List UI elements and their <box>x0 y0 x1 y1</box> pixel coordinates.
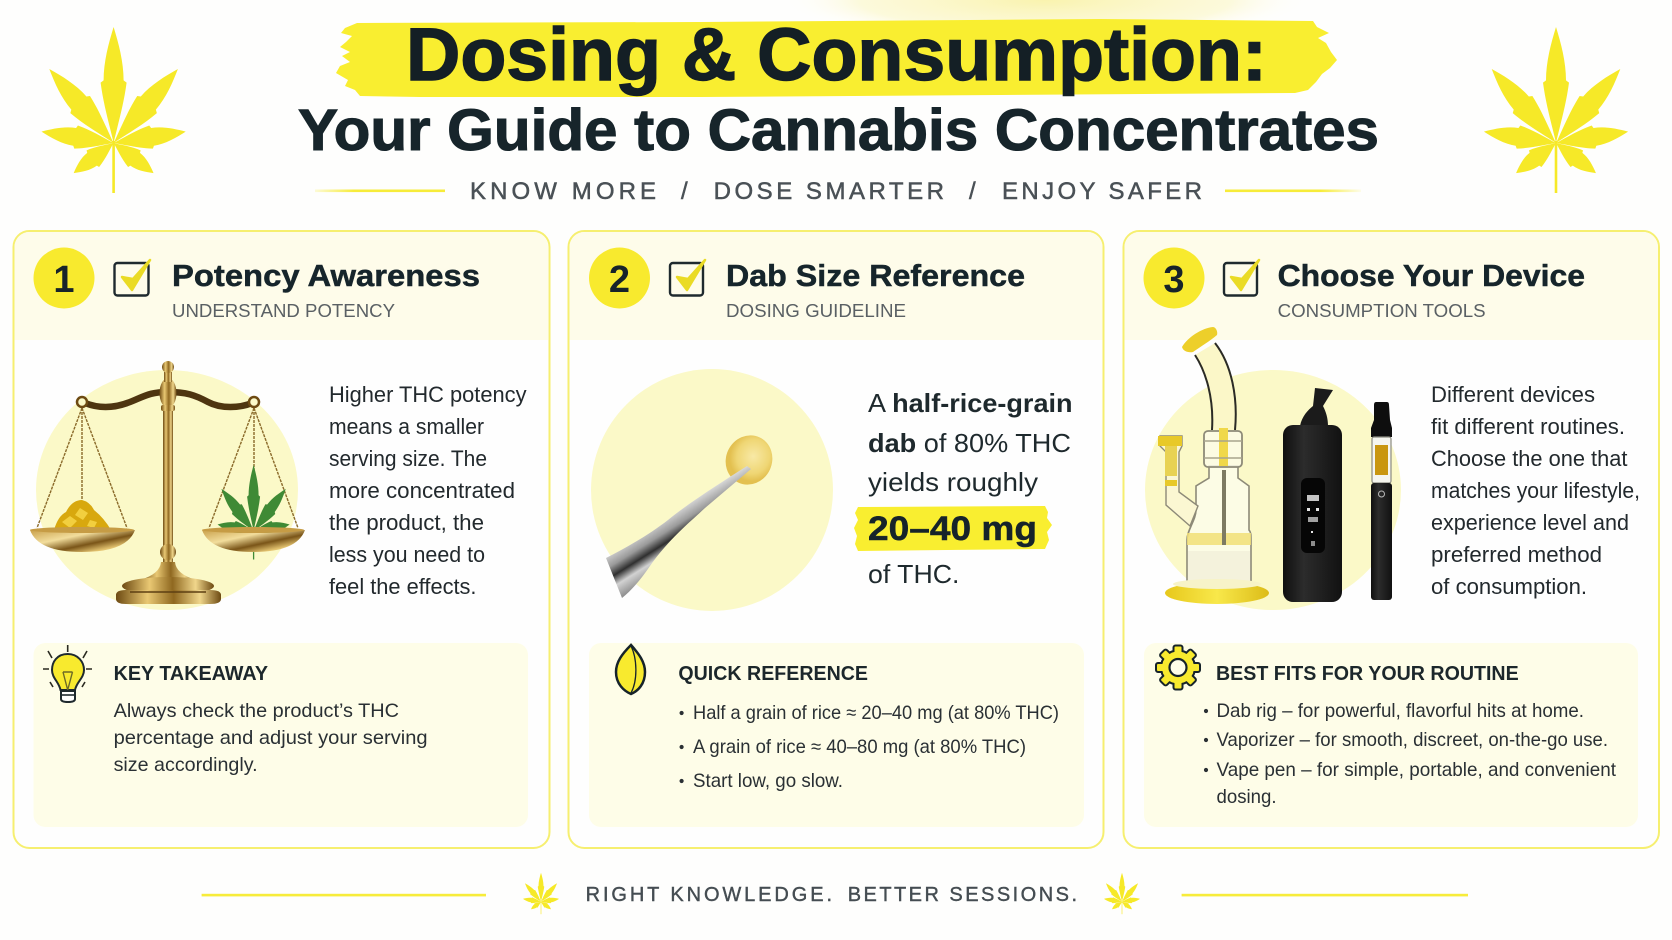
illustration: gold balance scale <box>30 361 305 610</box>
body text: dab of 80% THC <box>868 428 1071 458</box>
callout: quick reference <box>589 643 1084 827</box>
footer text: RIGHT KNOWLEDGE. <box>586 884 832 906</box>
icon: gear <box>1156 646 1200 690</box>
dab rig <box>1158 327 1269 604</box>
illustration: dab tool with concentrate <box>591 369 833 611</box>
bullet list: Start low, go slow. <box>693 770 843 792</box>
body text <box>854 388 1073 589</box>
callout heading: BEST FITS FOR YOUR ROUTINE <box>1216 663 1519 685</box>
body text: of consumption. <box>1431 574 1587 599</box>
number badge 1: 1 <box>53 259 75 301</box>
heading: Potency Awareness <box>172 258 480 293</box>
vaporizer <box>1283 388 1342 602</box>
icon: left cannabis leaf <box>39 27 188 193</box>
panel: choose your device <box>1124 231 1659 848</box>
number badge 3 <box>1144 248 1204 308</box>
bullet list: Vaporizer – for smooth, discreet, on-the-go use. <box>1216 729 1608 751</box>
body text: matches your lifestyle, <box>1431 478 1640 503</box>
illustration: dab rig, vaporizer and vape pen <box>1145 327 1401 610</box>
bullet list: Dab rig – for powerful, flavorful hits at home. <box>1216 700 1584 722</box>
body text <box>1431 382 1640 599</box>
card header band <box>1124 232 1658 340</box>
tagline: / <box>681 178 688 205</box>
icon: checkbox <box>1224 260 1259 296</box>
highlight: dose range <box>854 506 1052 551</box>
body text: preferred method <box>1431 542 1602 567</box>
callout heading: KEY TAKEAWAY <box>114 663 269 685</box>
bullet list: dosing. <box>1216 786 1276 808</box>
body text: fit different routines. <box>1431 414 1625 439</box>
callout text: percentage and adjust your serving <box>114 727 428 749</box>
body text: Different devices <box>1431 382 1595 407</box>
icon: right cannabis leaf <box>1482 27 1630 193</box>
body text: serving size. The <box>329 446 487 471</box>
number badge 2: 2 <box>609 259 630 301</box>
callout: key takeaway <box>34 643 528 827</box>
bullet list <box>680 702 1059 792</box>
bullet list <box>1204 700 1617 808</box>
body text: Higher THC potency <box>329 382 526 407</box>
footer text: BETTER SESSIONS. <box>848 884 1077 906</box>
subheading: DOSING GUIDELINE <box>726 301 906 321</box>
body text: more concentrated <box>329 478 515 503</box>
tagline <box>315 178 1361 205</box>
callout text: size accordingly. <box>114 754 258 776</box>
icon: small leaf right <box>1103 873 1141 914</box>
callout text: Always check the product’s THC <box>114 700 399 722</box>
icon: small leaf left <box>522 873 560 914</box>
heading: Dab Size Reference <box>726 258 1025 293</box>
number badge 2 <box>589 248 650 308</box>
card header band <box>570 232 1102 340</box>
tagline: DOSE SMARTER <box>714 178 944 205</box>
icon: light bulb <box>43 645 92 702</box>
card frame <box>14 231 550 848</box>
tagline: / <box>969 178 976 205</box>
icon: rice grain <box>616 645 645 694</box>
number badge 1 <box>34 248 94 308</box>
number badge 3: 3 <box>1163 259 1185 301</box>
card frame <box>568 231 1104 848</box>
vape pen <box>1371 402 1392 600</box>
subheading: UNDERSTAND POTENCY <box>172 301 395 321</box>
title brush highlight <box>336 19 1337 97</box>
bullet list: Vape pen – for simple, portable, and convenient <box>1216 759 1617 781</box>
body text <box>329 382 526 599</box>
body text: the product, the <box>329 510 484 535</box>
icon: checkbox <box>670 260 705 296</box>
card header band <box>14 232 548 340</box>
body text: means a smaller <box>329 414 484 439</box>
icon: checkbox <box>114 260 150 296</box>
title line 1: Dosing & Consumption: <box>406 13 1267 96</box>
highlight: dose range: 20–40 mg <box>868 510 1037 548</box>
body text: A half-rice-grain <box>868 388 1073 418</box>
callout: best fits <box>1144 643 1638 827</box>
top glow <box>780 0 1310 42</box>
body text: Choose the one that <box>1431 446 1627 471</box>
bullet list: A grain of rice ≈ 40–80 mg (at 80% THC) <box>693 736 1026 758</box>
tagline: ENJOY SAFER <box>1002 178 1202 205</box>
body text: of THC. <box>868 559 959 589</box>
subheading: CONSUMPTION TOOLS <box>1278 301 1486 321</box>
body text: feel the effects. <box>329 574 476 599</box>
body text: less you need to <box>329 542 485 567</box>
body text: experience level and <box>1431 510 1629 535</box>
header <box>39 13 1630 205</box>
bullet list: Half a grain of rice ≈ 20–40 mg (at 80% THC) <box>693 702 1059 724</box>
title line 2: Your Guide to Cannabis Concentrates <box>298 98 1379 163</box>
callout heading: QUICK REFERENCE <box>678 663 868 685</box>
footer <box>202 873 1468 914</box>
body text: yields roughly <box>868 467 1038 497</box>
footer text <box>586 884 1077 906</box>
tagline: KNOW MORE <box>470 178 656 205</box>
heading: Choose Your Device <box>1278 258 1585 293</box>
panel: potency awareness <box>14 231 550 848</box>
callout text <box>114 700 428 776</box>
card frame <box>1124 231 1659 848</box>
panel: dab size reference <box>568 231 1104 848</box>
